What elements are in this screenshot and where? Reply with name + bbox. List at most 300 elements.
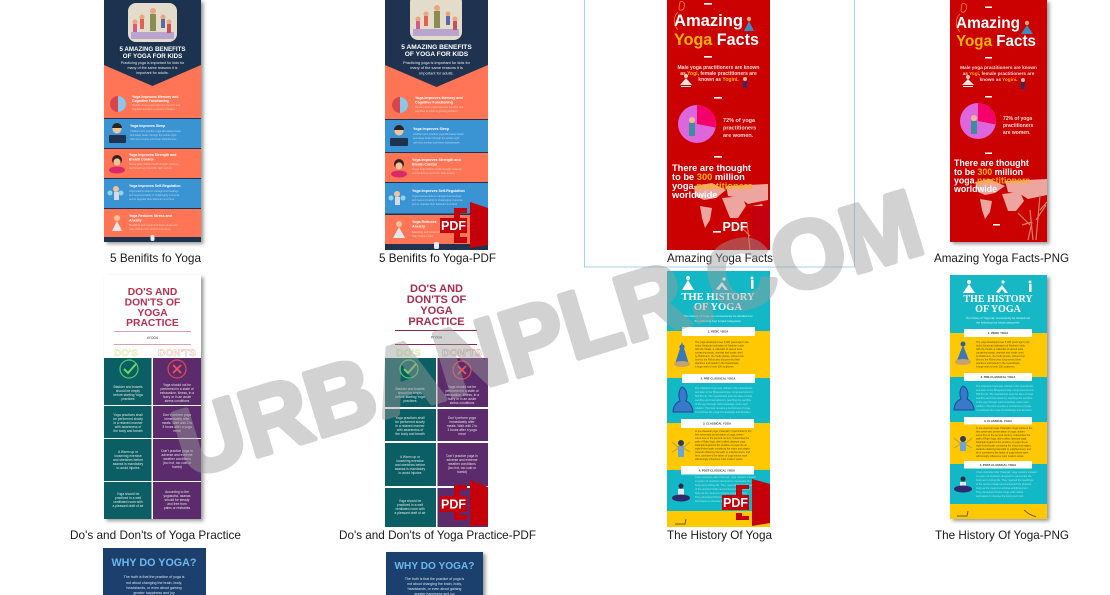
section 2 cyan xyxy=(667,378,770,423)
grid row 1: should be empty xyxy=(398,391,422,395)
row 2 sleep xyxy=(104,119,201,148)
illustration: kids doing yoga xyxy=(410,0,462,40)
body text: not about changing the brain, body, xyxy=(126,581,182,585)
section 3 yellow: some time in the second century. It describes the xyxy=(695,437,750,440)
section 1 yellow: The yoga developed over 5,000 years ago in the xyxy=(695,341,749,344)
row 1 memory: Cognitive Functioning xyxy=(132,99,169,103)
grid row 3: humid) xyxy=(457,470,467,474)
title: OF YOGA xyxy=(694,302,743,313)
grid row 2: meals. Wait until 2 to xyxy=(447,424,477,428)
section 3 yellow xyxy=(667,423,770,470)
grid row 3 xyxy=(104,439,201,481)
title: THE HISTORY xyxy=(681,292,755,303)
grid row 4: Yoga should be xyxy=(399,499,421,503)
row 5 stress: Breathing and movement lower stress and xyxy=(129,224,178,227)
row 1 memory: Studies show yoga improves memory and xyxy=(415,106,463,109)
row 4 self-regulation: Yoga teaches kids to manage their feelings xyxy=(129,190,178,193)
row 2 sleep: and sleep better through the whole night xyxy=(413,136,460,140)
illustration: kids doing yoga xyxy=(128,3,177,42)
hashtag: #YOGA xyxy=(431,336,443,340)
grid row 2: Don't perform yoga xyxy=(163,413,191,417)
section 1 yellow xyxy=(950,333,1047,377)
grid row 4: should be steady xyxy=(165,498,190,502)
section 1 yellow: with the Vedas, a collection of sacred texts xyxy=(976,348,1024,351)
icon: footer figure xyxy=(434,242,439,249)
icon: PDF badge: PDF xyxy=(441,498,466,512)
thumbnail: History of Yoga PNG xyxy=(950,275,1047,519)
section 2 cyan: wisdom. The Gita remains a central text of yoga. xyxy=(976,404,1032,408)
icon: PDF badge xyxy=(440,480,488,526)
row 1 memory: cognitive function in growing children xyxy=(132,107,175,111)
icon: footer figure xyxy=(150,235,154,241)
title: OF YOGA xyxy=(975,304,1022,315)
fact: yogi and yogini: as Yogi, female practitioners are xyxy=(963,71,1034,76)
heading: 5 AMAZING BENEFITS xyxy=(401,44,472,51)
icons: yoga poses xyxy=(682,276,754,290)
grid row 2: in a relaxed manner xyxy=(113,421,143,425)
section 2 cyan: 500 B.C.E. The Upanishads took the idea of ritual xyxy=(695,394,752,398)
column header do's: DO'S xyxy=(396,348,421,359)
grid row 4: practiced in a well xyxy=(115,496,141,500)
row 5 stress: Anxiety xyxy=(412,224,425,228)
icon: PDF badge: PDF xyxy=(722,220,748,234)
row 1 memory: Yoga Improves Memory and xyxy=(132,95,178,99)
section 4 cyan: a system of practices designed to rejuvenate the xyxy=(695,479,751,483)
section 1 yellow: by Brahmans, the Vedic priests, refined over xyxy=(695,355,744,358)
intro text: important for adults. xyxy=(136,71,169,75)
fact: yogi and yogini: known as Yogini. xyxy=(980,77,1017,82)
caption: The History Of Yoga-PNG xyxy=(935,528,1069,542)
row 4 self-regulation: and to regulate their behavior at school xyxy=(412,202,457,206)
row 5 stress xyxy=(104,209,201,237)
section 1 yellow: time by the Rishis who documented their xyxy=(976,358,1021,362)
fact: 300 million: to be 300 million xyxy=(954,167,1023,177)
grid row 3: Don't practice yoga in xyxy=(161,449,193,453)
grid row 1: before starting Yoga xyxy=(395,395,425,399)
icon: PDF badge xyxy=(722,206,770,250)
row 5 stress: Yoga Reduces Stress and xyxy=(129,214,172,218)
grid row 3: and stretches before xyxy=(395,463,425,467)
section 1 yellow: containing songs, mantras and rituals used xyxy=(695,352,743,354)
grid row 3: (too hot, too cold or xyxy=(448,466,477,470)
section 4 cyan: body as the means to achieve enlightenment. xyxy=(976,486,1028,490)
grid row 1: hurry or in an acute xyxy=(163,395,191,399)
section 1 yellow: a huge work of over 200 scriptures. xyxy=(695,366,734,368)
section 2 cyan: Pre-Classical Yoga was refined in the Upanishads xyxy=(976,385,1033,388)
grid row 2: be performed slowly xyxy=(395,420,425,424)
section 2 cyan: 500 B.C.E. The Upanishads took the idea of ritual xyxy=(976,392,1033,396)
divider dash xyxy=(704,3,712,5)
pill 3 xyxy=(681,419,754,428)
row 3 strength: Breath Control xyxy=(129,158,154,162)
thumbnail: 5 Benefits of Yoga PDF xyxy=(385,0,488,250)
grid row 1: stress conditions xyxy=(165,399,190,403)
section 2 cyan: and later in the Bhagavad-Gita, composed around xyxy=(976,388,1034,392)
row 1 memory: cognitive function in growing children xyxy=(415,109,458,113)
column header do's: DO'S xyxy=(114,348,138,358)
row 2 sleep xyxy=(385,120,488,152)
row 5 stress: help children feel relaxed and happy xyxy=(129,227,171,231)
pill 1 xyxy=(682,327,755,336)
grid row 4: According to the xyxy=(165,490,189,494)
grid row 4: ventilated room with xyxy=(113,500,143,504)
pill 4 xyxy=(681,466,754,474)
row 4 self-regulation: Yoga teaches kids to manage their feelings xyxy=(412,195,461,198)
row 3 strength: Yoga Improves Strength and xyxy=(129,153,176,157)
grid row 3: adverse and extreme xyxy=(162,453,193,457)
grid row 1: performed in a state of xyxy=(446,389,479,393)
fact: 300 million: worldwide xyxy=(671,190,717,200)
subtitle: The history of Yoga can conveniently be divided into xyxy=(966,316,1030,320)
section 1 yellow: The yoga developed over 5,000 years ago in the xyxy=(976,341,1030,344)
row 1 memory xyxy=(110,95,181,112)
heading: DO'S AND xyxy=(128,287,177,298)
grid row 4: Yoga should be xyxy=(117,492,139,496)
grid row 2: in a relaxed manner xyxy=(395,424,425,428)
section 2 cyan: Pre-Classical Yoga was refined in the Upanishads xyxy=(695,387,752,390)
pie caption: practitioners xyxy=(723,126,756,132)
column header don'ts: DON'TS xyxy=(442,348,482,359)
section 3 yellow: Patanjali organized the practice of yoga into an xyxy=(695,444,748,447)
fact: 300 million: worldwide xyxy=(953,184,997,194)
grid row 2: meal xyxy=(173,429,181,433)
row 3 strength: Poses help children build strength, balance xyxy=(412,168,461,171)
pill 3: 3. CLASSICAL YOGA xyxy=(984,419,1012,423)
fact: 300 million: There are thought xyxy=(954,158,1029,168)
pill 3: 3. CLASSICAL YOGA xyxy=(703,422,731,426)
grid row 2: with awareness of xyxy=(115,425,141,429)
heading: 5 AMAZING BENEFITS xyxy=(119,46,186,53)
section 2 cyan xyxy=(950,377,1047,422)
divider dash xyxy=(985,57,992,58)
section 1 yellow: Indus-Sarasvati civilization of Northern India xyxy=(976,344,1025,348)
section 3 yellow: towards obtaining Samadhi or enlightenment, and xyxy=(976,448,1032,451)
icon: male yogi xyxy=(962,75,974,87)
grid row 3: loosening exercise xyxy=(114,454,142,458)
intro text: many of the same reasons it is xyxy=(410,65,463,70)
pie caption: 72% of yoga xyxy=(723,118,755,124)
divider dash xyxy=(713,231,721,233)
grid row 4: a pleasant draft of air xyxy=(395,511,426,515)
section 4 cyan: body and prolong life. They rejected the teachings xyxy=(695,483,753,487)
caption: Do's and Don'ts of Yoga Practice-PDF xyxy=(339,528,536,542)
section 2 cyan: It combines the yoga of knowledge and devotion. xyxy=(976,408,1033,412)
grid row 3: weather conditions xyxy=(163,457,191,461)
grid row 2: immediately after xyxy=(164,417,190,421)
section 3 yellow: path of Raja Yoga, often called classical yoga. xyxy=(976,438,1027,440)
section 1 yellow: Indus-Sarasvati civilization of Northern India xyxy=(695,344,744,348)
section 3 yellow: he is considered the father of yoga whose work xyxy=(976,452,1029,454)
watermark: URBANPLR.COM xyxy=(162,170,934,498)
world map xyxy=(694,183,768,228)
row 2 sleep: and sleep better through the whole night xyxy=(130,133,177,137)
grid row 3: and stretches before xyxy=(113,458,143,462)
intro text: many of the same reasons it is xyxy=(127,66,178,70)
grid row 4: a pleasant draft of air xyxy=(113,504,144,508)
section: orange background xyxy=(104,65,201,118)
thumbnail: Amazing Yoga Facts PNG xyxy=(950,0,1047,242)
divider dash xyxy=(714,156,722,158)
row 4 self-regulation xyxy=(385,183,488,214)
grid row 3: adverse and extreme xyxy=(447,458,478,462)
subtitle: The history of Yoga can conveniently be divided into xyxy=(683,314,753,318)
grid row 2: 3 hours after a yoga xyxy=(447,428,477,432)
caption: Amazing Yoga Facts xyxy=(667,251,773,265)
row 4 self-regulation: and to regulate their behavior at school xyxy=(129,197,174,201)
section 3 yellow: eight limbed path containing the steps and stages xyxy=(976,444,1032,448)
grid row 3: A Warm up or xyxy=(118,450,138,454)
pill 1: 1. VEDIC YOGA xyxy=(988,331,1008,335)
grid row 4 xyxy=(385,488,488,527)
row 4 self-regulation: Yoga Improves Self-Regulation xyxy=(129,184,180,188)
icon: meditating woman xyxy=(1021,21,1033,34)
grid row 4: practiced in a well xyxy=(397,503,423,507)
divider dash xyxy=(714,97,722,99)
body text: The truth is that the practice of yoga is xyxy=(405,577,464,581)
section 3 yellow: towards obtaining Samadhi or enlightenment, and xyxy=(695,451,751,454)
section 2 cyan: sacrifice and internalized it, teaching the sacrifice xyxy=(695,398,752,402)
grid row 4: yogasutra, asanas xyxy=(164,494,191,498)
section 2 cyan: sacrifice and internalized it, teaching the sacrifice xyxy=(976,396,1033,400)
grid row 1: should be empty xyxy=(116,389,140,393)
row 3 strength: Poses help children build strength, balance xyxy=(129,163,178,166)
section 2 cyan: of the ego through self-knowledge, action and xyxy=(976,400,1029,404)
section 1 yellow: practices and beliefs in the Upanishads, xyxy=(976,362,1020,365)
section 2 cyan: of the ego through self-knowledge, action and xyxy=(695,402,748,406)
grid row 4: ventilated room with xyxy=(395,507,425,511)
grid row 3: Don't practice yoga in xyxy=(446,454,478,458)
pill 2: 2. PRE-CLASSICAL YOGA xyxy=(981,375,1015,379)
grid row 4: and free from xyxy=(167,502,187,506)
row 4 self-regulation: Yoga Improves Self-Regulation xyxy=(412,189,465,193)
row 4 self-regulation: and respond calmly in challenging moments xyxy=(412,198,463,202)
fact: yogi and yogini: Male yoga practitioners are known xyxy=(960,65,1037,70)
caption: 5 Benifits fo Yoga xyxy=(110,251,201,265)
section 3 yellow: path of Raja Yoga, often called classical yoga. xyxy=(695,440,746,444)
grid row 2: Yoga practices shall xyxy=(113,413,143,417)
footer yellow xyxy=(667,511,770,527)
grid row 2: be performed slowly xyxy=(113,417,143,421)
heading: PRACTICE xyxy=(126,318,179,329)
section 4 cyan: A few centuries after Patanjali, yoga masters created xyxy=(976,471,1037,474)
body text: greater happiness and joy xyxy=(133,591,175,595)
row 2 sleep: Children who practice yoga fall asleep faster xyxy=(413,133,464,136)
caption: Do's and Don'ts of Yoga Practice xyxy=(70,528,241,542)
pill 1 xyxy=(964,329,1032,337)
fact: 300 million: yoga practitioners xyxy=(954,176,1030,186)
row 5 stress: Breathing and movement xyxy=(412,231,441,234)
grid row 1: stress conditions xyxy=(450,401,475,405)
divider dash xyxy=(985,96,992,98)
grid row 2: Yoga practices shall xyxy=(395,416,425,420)
section 3 yellow: still strongly influences most modern styles. xyxy=(976,455,1024,458)
section 1 yellow: by Brahmans, the Vedic priests, refined over xyxy=(976,355,1025,358)
thumbnail: Amazing Yoga Facts xyxy=(667,0,770,250)
grid row 3: humid) xyxy=(172,465,182,469)
grid row 2: with awareness of xyxy=(397,428,423,432)
grid row 1 xyxy=(104,358,201,405)
row 3 strength: Breath Control xyxy=(412,162,437,166)
illustration: plant xyxy=(741,222,756,250)
grid row 3: to avoid injuries xyxy=(117,466,140,470)
row 4 self-regulation: and respond calmly in challenging moments xyxy=(129,193,180,197)
pill 4: 4. POST-CLASSICAL YOGA xyxy=(980,463,1016,467)
row 5 stress xyxy=(385,215,488,244)
divider dash xyxy=(985,6,992,8)
title second line: Yoga Facts xyxy=(674,30,759,49)
column header don'ts: DON'TS xyxy=(158,348,196,358)
section 4 cyan: body and prolong life. They rejected the teachings xyxy=(976,478,1034,482)
grid row 1: before starting Yoga xyxy=(113,393,143,397)
grid row 1: hurry or in an acute xyxy=(448,397,476,401)
caption: The History Of Yoga xyxy=(667,528,772,542)
row 2 sleep: Yoga Improves Sleep xyxy=(130,124,165,128)
section 2 cyan: and later in the Bhagavad-Gita, composed around xyxy=(695,390,753,394)
illustration: plant xyxy=(1018,195,1047,240)
section 4 cyan xyxy=(667,470,770,511)
body text: not about changing the brain, body, xyxy=(407,582,462,586)
thumbnail: Do's and Don'ts xyxy=(104,275,201,519)
section 4 cyan: of the ancient Vedas and embraced the physical xyxy=(695,487,751,491)
intro text: important for adults. xyxy=(419,70,454,76)
body text: headstands, or even about gaining xyxy=(408,587,461,591)
icon: meditating woman xyxy=(744,17,754,31)
footer yellow xyxy=(950,504,1047,519)
world map xyxy=(975,179,1047,219)
fact: yogi and yogini: known as Yogini. xyxy=(698,77,739,83)
section 3 yellow: first systematic presentation of yoga, written xyxy=(976,430,1025,434)
caption: 5 Benifits fo Yoga-PDF xyxy=(379,251,496,265)
row 5 stress: help children relax xyxy=(412,234,434,238)
section 2 cyan: wisdom. The Gita remains a central text of yoga. xyxy=(695,406,751,410)
row 5 stress: Anxiety xyxy=(129,218,142,222)
heading: PRACTICE xyxy=(408,316,465,328)
thumbnail: 5 Benefits of Yoga xyxy=(104,0,201,242)
row 5 stress: Yoga Reduces xyxy=(412,220,436,224)
icon: female yogini xyxy=(743,77,747,88)
section 3 yellow: he is considered the father of yoga whose work xyxy=(695,454,748,458)
thumbnail: Do's and Don'ts PDF xyxy=(385,283,488,527)
icon: PDF badge: PDF xyxy=(441,219,466,233)
section 1 yellow: practices and beliefs in the Upanishads, xyxy=(695,362,739,365)
grid row 2: 3 hours after a yoga xyxy=(162,425,192,429)
pill 2 xyxy=(682,374,755,383)
hashtag: #YOGA xyxy=(147,336,159,340)
section 4 cyan: A few centuries after Patanjali, yoga masters created xyxy=(695,476,756,479)
heading: WHY DO YOGA? xyxy=(394,560,474,572)
section: orange background xyxy=(385,65,488,119)
grid row 3: loosening exercise xyxy=(396,459,424,463)
row 3 strength xyxy=(385,153,488,182)
grid row 1: exhaustion, illness, in a xyxy=(160,391,194,395)
heading: YOGA xyxy=(420,305,453,317)
pill 3 xyxy=(964,417,1032,424)
section 1 yellow: with the Vedas, a collection of sacred texts xyxy=(695,348,743,351)
grid row 1: Bladder and bowels xyxy=(114,385,142,389)
grid row 3: asanas is mandatory xyxy=(395,467,426,471)
heading: OF YOGA FOR KIDS xyxy=(123,53,182,60)
grid row 2 xyxy=(385,409,488,441)
grid row 3: A Warm up or xyxy=(400,455,420,459)
heading: DON'TS OF xyxy=(407,294,467,306)
section 4 cyan: of the ancient Vedas and embraced the physical xyxy=(976,482,1032,486)
thumbnail: Why Do Yoga copy xyxy=(386,552,483,595)
grid row 3 xyxy=(385,443,488,486)
section 4 cyan: a system of practices designed to rejuvenate the xyxy=(976,474,1032,478)
title: THE HISTORY xyxy=(963,294,1033,305)
section 3 yellow: some time in the second century. It describes the xyxy=(976,434,1031,437)
heading: DON'TS OF xyxy=(125,298,180,308)
intro text: Practicing yoga is important for kids for xyxy=(403,60,470,65)
intro text: Practicing yoga is important for kids for xyxy=(121,61,184,65)
grid row 1: Yoga should not be xyxy=(448,385,476,389)
grid row 4: pains or restraints xyxy=(164,506,190,510)
icon: female yogini xyxy=(1021,78,1025,89)
grid row 3: to avoid injuries xyxy=(399,471,422,475)
row 3 strength xyxy=(104,149,201,178)
row 2 sleep: with less anxiety and fewer disturbances xyxy=(130,137,177,141)
title: Amazing xyxy=(674,11,743,30)
body text: The truth is that the practice of yoga is xyxy=(124,575,184,579)
row 2 sleep: Children who practice yoga fall asleep faster xyxy=(130,130,181,133)
section 3 yellow xyxy=(950,422,1047,464)
row 2 sleep: Yoga Improves Sleep xyxy=(413,127,450,131)
subtitle: the following four broad categories: xyxy=(695,319,742,323)
section 4 cyan: body as the means to achieve enlightenment. xyxy=(695,491,747,495)
section 1 yellow: containing songs, mantras and rituals used xyxy=(976,352,1024,354)
grid row 2: meal xyxy=(458,432,466,436)
row 3 strength: Yoga Improves Strength and xyxy=(412,158,461,162)
pie chart xyxy=(960,103,996,139)
section 3 yellow: In pre-classical yoga, Patanjali's Yoga Sutras is the xyxy=(695,430,751,433)
row 3 strength: and breathing control for daily activity xyxy=(412,171,456,175)
title: Amazing xyxy=(956,15,1020,32)
section 4 cyan: They developed Tantra Yoga, with radical xyxy=(976,490,1024,494)
caption: Amazing Yoga Facts-PNG xyxy=(934,251,1069,265)
section 4 cyan: techniques to cleanse the body and mind. xyxy=(976,494,1024,498)
icons: yoga poses xyxy=(963,280,1032,293)
grid row 2: meals. Wait until 2 to xyxy=(162,421,192,425)
heading: YOGA xyxy=(137,308,168,319)
pie caption: practitioners xyxy=(1003,123,1034,129)
title second line: Yoga Facts xyxy=(956,33,1036,50)
grid row 1: practices xyxy=(121,397,135,401)
grid row 1: Bladder and bowels xyxy=(396,387,424,391)
grid row 1 xyxy=(385,358,488,407)
row 1 memory: Yoga Improves Memory and xyxy=(415,96,463,100)
row 1 memory xyxy=(392,96,464,113)
row 4 self-regulation xyxy=(104,179,201,208)
divider dash xyxy=(985,152,992,154)
thumbnail: History of Yoga xyxy=(667,271,770,527)
grid row 3: (too hot, too cold or xyxy=(163,461,192,465)
icon: PDF badge xyxy=(440,202,488,248)
grid row 2: Don't perform yoga xyxy=(448,416,476,420)
selection highlight box xyxy=(584,0,854,267)
pie caption: are women. xyxy=(1003,130,1031,136)
row 3 strength: and breathing control for daily activity xyxy=(129,166,173,170)
pill 4: 4. POST-CLASSICAL YOGA xyxy=(699,468,735,472)
grid row 3: asanas is mandatory xyxy=(113,462,144,466)
grid row 4 xyxy=(104,482,201,519)
fact: 300 million: yoga practitioners xyxy=(672,181,753,191)
section 3 yellow: In pre-classical yoga, Patanjali's Yoga Sutras is the xyxy=(976,427,1032,430)
section 3 yellow: first systematic presentation of yoga, written xyxy=(695,434,744,436)
fact: yogi and yogini: as Yogi, female practitioners are xyxy=(680,71,757,77)
section 1 yellow: time by the Rishis who documented their xyxy=(695,358,740,362)
fact: 300 million: There are thought xyxy=(672,163,751,173)
divider dash xyxy=(704,56,712,58)
